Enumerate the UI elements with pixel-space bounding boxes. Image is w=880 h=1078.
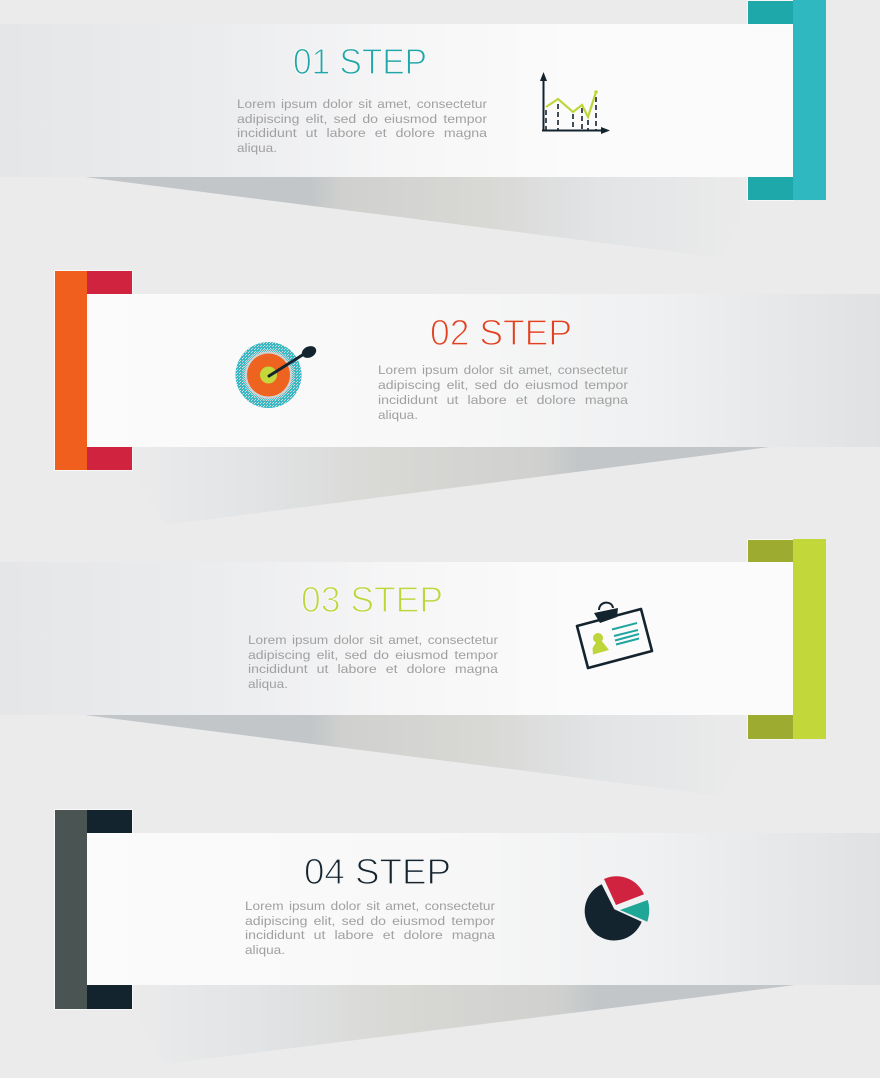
ribbon: step 1 bbox=[0, 24, 793, 177]
panel: step 4 bbox=[54, 809, 880, 1064]
tab: step 4 bbox=[54, 809, 133, 1010]
ribbon: step 2 bbox=[87, 294, 880, 447]
text block: step 2: Lorem ipsum dolor sit amet, consectetur bbox=[378, 363, 628, 377]
text block: step 3 bbox=[248, 633, 498, 691]
text block: step 3: adipiscing elit, sed do eiusmod tempor bbox=[248, 648, 498, 662]
text block: step 3: aliqua. bbox=[248, 677, 288, 691]
shadow: step 3 bbox=[85, 715, 748, 796]
text block: step 1 bbox=[237, 97, 487, 155]
text block: step 1: incididunt ut labore et dolore magna bbox=[237, 126, 487, 140]
text block: step 3: incididunt ut labore et dolore magna bbox=[248, 662, 498, 676]
tab: step 1 bbox=[747, 0, 826, 201]
tab: step 2 bbox=[54, 270, 133, 471]
text block: step 2: adipiscing elit, sed do eiusmod tempor bbox=[378, 378, 628, 392]
shadow: step 4 bbox=[132, 985, 795, 1064]
icon: line chart bbox=[540, 72, 610, 134]
text block: step 1: Lorem ipsum dolor sit amet, consectetur bbox=[237, 97, 487, 111]
ribbon: step 3 bbox=[0, 562, 793, 715]
ribbon: step 4 bbox=[87, 833, 880, 985]
icon: pie chart bbox=[585, 876, 649, 941]
text block: step 4 bbox=[245, 899, 495, 957]
text block: step 4: incididunt ut labore et dolore magna bbox=[245, 928, 495, 942]
text block: step 4: adipiscing elit, sed do eiusmod tempor bbox=[245, 914, 495, 928]
text block: step 1: adipiscing elit, sed do eiusmod tempor bbox=[237, 112, 487, 126]
panel: step 2 bbox=[54, 270, 880, 525]
text block: step 2: incididunt ut labore et dolore magna bbox=[378, 393, 628, 407]
heading: 03 STEP: 03 STEP bbox=[301, 579, 443, 620]
tab: step 3 bbox=[747, 539, 826, 740]
text block: step 3: Lorem ipsum dolor sit amet, consectetur bbox=[248, 633, 498, 647]
heading: 01 STEP: 01 STEP bbox=[293, 41, 427, 82]
panel: step 3 bbox=[0, 539, 826, 796]
heading: 02 STEP: 02 STEP bbox=[430, 312, 572, 353]
icon: ID badge bbox=[577, 603, 652, 668]
text block: step 4: Lorem ipsum dolor sit amet, consectetur bbox=[245, 899, 495, 913]
shadow: step 2 bbox=[132, 447, 770, 525]
text block: step 2 bbox=[378, 363, 628, 422]
text block: step 4: aliqua. bbox=[245, 943, 285, 957]
panel: step 1 bbox=[0, 0, 826, 258]
shadow: step 1 bbox=[85, 177, 748, 258]
text block: step 1: aliqua. bbox=[237, 141, 277, 155]
icon: target with dart bbox=[236, 342, 318, 408]
heading: 04 STEP: 04 STEP bbox=[304, 851, 451, 892]
text block: step 2: aliqua. bbox=[378, 408, 418, 422]
